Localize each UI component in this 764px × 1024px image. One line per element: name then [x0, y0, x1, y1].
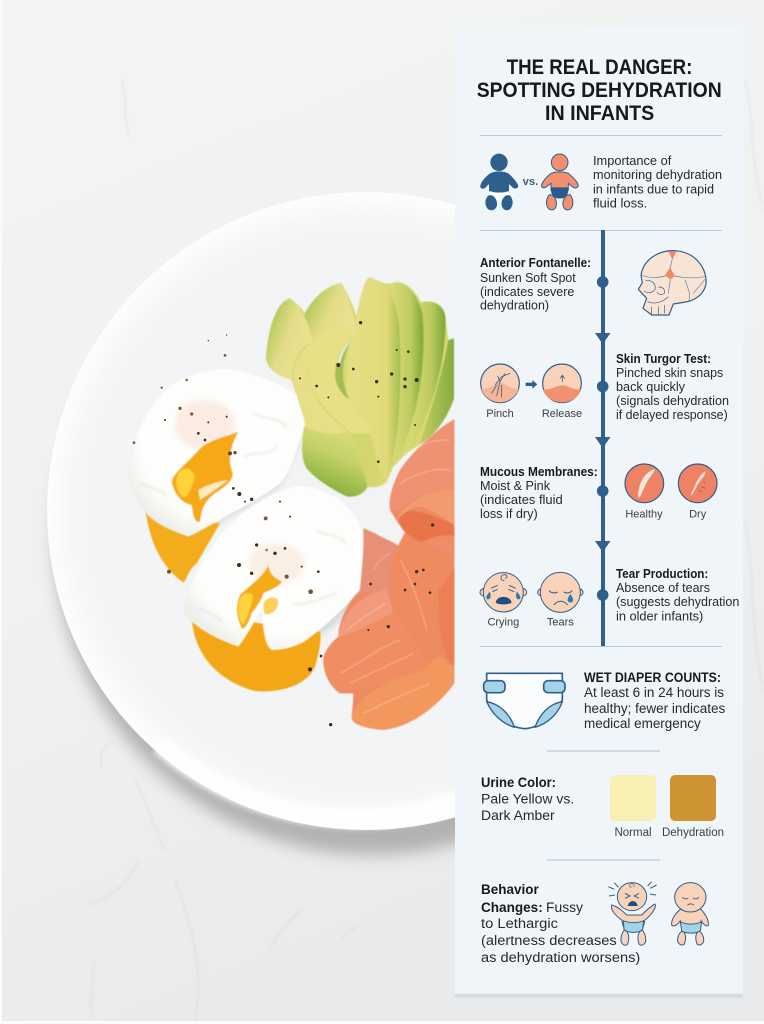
icon: fussy baby	[608, 882, 657, 945]
text: wet diaper counts: WET DIAPER COUNTS:	[584, 670, 721, 686]
icon: infant skull	[638, 251, 706, 315]
text: anterior fontanelle: Sunken Soft Spot	[480, 270, 576, 285]
text: wet diaper counts: At least 6 in 24 hours is	[584, 685, 724, 701]
text: mucous membranes: loss if dry)	[480, 506, 538, 521]
text: intro: in infants due to rapid	[593, 181, 714, 196]
text: skin turgor test: Skin Turgor Test:	[616, 351, 711, 366]
infographic panel	[455, 27, 743, 997]
text: urine color: Urine Color:	[481, 775, 556, 791]
text: behavior changes: Changes:	[481, 900, 543, 916]
food: egg shadows	[130, 427, 365, 633]
text: tear production: Tear Production:	[616, 566, 708, 581]
text: anterior fontanelle: dehydration)	[480, 298, 549, 312]
text: behavior changes	[481, 882, 640, 966]
text: intro: monitoring dehydration	[593, 167, 722, 182]
text: urine color	[481, 775, 574, 824]
text: skin turgor test: back quickly	[616, 379, 685, 394]
food: black pepper specks	[133, 321, 434, 726]
text: tear production	[616, 566, 739, 624]
text: skin turgor test: Pinched skin snaps	[616, 365, 724, 380]
icon: lethargic baby	[672, 883, 708, 945]
icon: baby comparison: vs.	[523, 176, 538, 188]
icon: crying and tears faces: Tears	[547, 617, 574, 629]
timeline	[595, 230, 610, 646]
icon: skin pinch and release: Pinch	[486, 408, 514, 420]
text: mucous membranes: Mucous Membranes:	[480, 464, 598, 479]
food: yolk pools	[145, 507, 321, 691]
text: mucous membranes: (indicates fluid	[480, 492, 563, 507]
text: wet diaper counts: medical emergency	[584, 716, 702, 732]
text: urine color: Dark Amber	[481, 808, 555, 824]
text: skin turgor test	[616, 351, 729, 422]
food: smoked salmon	[323, 419, 454, 730]
icon: crying and tears faces: Crying	[487, 617, 519, 629]
text: skin turgor test: if delayed response)	[616, 407, 728, 422]
text: tear production: Absence of tears	[616, 580, 710, 595]
text: skin turgor test: (signals dehydration	[616, 393, 729, 408]
text: behavior changes: to Lethargic	[481, 916, 558, 932]
text: anterior fontanelle	[480, 255, 591, 312]
icon: healthy and dry membranes: Healthy	[625, 509, 663, 521]
text: urine color: Pale Yellow vs.	[481, 792, 574, 808]
icon: baby comparison	[480, 154, 578, 210]
title: SPOTTING DEHYDRATION	[477, 79, 722, 102]
text: wet diaper counts	[584, 670, 725, 732]
text: behavior changes: Fussy	[546, 900, 584, 916]
swatches: urine color: Dehydration	[662, 827, 724, 839]
text: tear production: in older infants)	[616, 608, 703, 624]
icon: diaper	[484, 673, 565, 729]
plate	[47, 192, 690, 855]
icon: skin pinch and release	[481, 364, 582, 420]
text: intro: fluid loss.	[593, 195, 647, 210]
title: IN INFANTS	[545, 102, 654, 125]
text: behavior changes: Behavior	[481, 882, 539, 898]
text: mucous membranes	[480, 464, 598, 521]
text: tear production: (suggests dehydration	[616, 594, 739, 609]
text: wet diaper counts: healthy; fewer indicates	[584, 701, 725, 717]
food: avocado	[266, 277, 454, 497]
text: anterior fontanelle: Anterior Fontanelle:	[480, 255, 591, 270]
swatches: urine color: Normal	[614, 827, 652, 839]
text: intro	[593, 153, 722, 210]
icon: healthy and dry membranes	[625, 464, 717, 521]
text: mucous membranes: Moist & Pink	[480, 478, 550, 493]
icon: skin pinch and release: Release	[542, 408, 582, 420]
icon: healthy and dry membranes: Dry	[689, 509, 707, 521]
food: poached eggs	[131, 369, 363, 650]
text: intro: Importance of	[593, 153, 672, 168]
text: behavior changes: as dehydration worsens)	[481, 950, 640, 966]
swatches: urine color	[610, 775, 724, 839]
text: behavior changes: (alertness decreases	[481, 933, 617, 949]
title	[477, 56, 722, 125]
icon: crying and tears faces	[480, 572, 583, 629]
text: anterior fontanelle: (indicates severe	[480, 284, 574, 299]
title: THE REAL DANGER:	[507, 56, 692, 79]
